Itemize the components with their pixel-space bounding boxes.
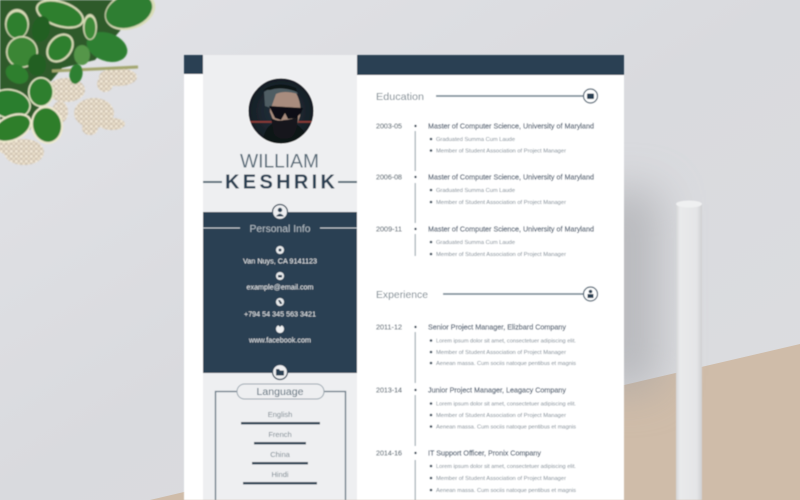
icon: phone xyxy=(276,298,284,306)
experience entry 3 xyxy=(376,450,576,500)
education entry 3: 2009-11 xyxy=(376,226,402,234)
header block left xyxy=(184,55,203,74)
experience entry 2 xyxy=(376,388,576,446)
experience entry 1 xyxy=(376,324,576,383)
language: English: English xyxy=(268,410,292,419)
heading rule right xyxy=(320,228,357,229)
beige tabletop xyxy=(150,344,800,500)
heading: experience: Experience xyxy=(376,289,428,301)
address text: Van Nuys, CA 9141123 xyxy=(243,258,317,266)
education entry 1: Master of Computer Science, University of Maryland xyxy=(428,124,594,130)
experience entry 2: Junior Project Manager, Leagacy Company xyxy=(428,388,567,394)
experience entry 3: 2014-16 xyxy=(376,450,402,458)
name rule left xyxy=(203,181,222,183)
education entry 3 xyxy=(376,226,594,258)
education entry 1: Member of Student Association of Project Manager xyxy=(436,148,566,154)
experience entry 1: Lorem ipsum dolor sit amet, consectetuer adipiscing elit. xyxy=(436,338,576,344)
language frame xyxy=(216,392,346,500)
heading rule left xyxy=(203,228,240,229)
icon: person badge xyxy=(584,287,598,301)
education entry 2: Graduated Summa Cum Laude xyxy=(436,188,515,194)
sidebar background xyxy=(203,55,357,500)
education entry 1 xyxy=(376,124,594,171)
experience entry 3: Lorem ipsum dolor sit amet, consectetuer adipiscing elit. xyxy=(436,464,576,470)
background shadow of paper xyxy=(590,190,660,390)
name rule right xyxy=(338,181,357,183)
icon: folder badge xyxy=(272,364,288,380)
experience entry 2: Lorem ipsum dolor sit amet, consectetuer adipiscing elit. xyxy=(436,402,576,408)
language heading pill xyxy=(237,384,324,399)
icon: person badge xyxy=(272,204,288,220)
experience entry 1: Aenean massa. Cum sociis natoque pentibus et magnis xyxy=(436,361,576,367)
header bar right xyxy=(357,55,624,75)
education entry 3: Graduated Summa Cum Laude xyxy=(436,240,515,246)
resume paper xyxy=(184,55,624,500)
icon: briefcase badge xyxy=(584,89,598,103)
heading: education: Education xyxy=(376,91,424,103)
email text: example@email.com xyxy=(246,284,314,292)
experience entry 3: Member of Student Association of Project Manager xyxy=(436,476,566,482)
panel: personal info xyxy=(203,212,357,373)
experience entry 2: Aenean massa. Cum sociis natoque pentibus et magnis xyxy=(436,424,576,430)
experience entry 2: 2013-14 xyxy=(376,388,402,394)
first name: WILLIAM xyxy=(240,152,319,172)
rod prop xyxy=(676,200,702,500)
education entry 3: Member of Student Association of Project Manager xyxy=(436,252,566,258)
experience entry 1: Senior Project Manager, Elizbard Company xyxy=(428,324,567,332)
experience entry 3: Aenean massa. Cum sociis natoque pentibus et magnis xyxy=(436,488,576,494)
icon: email xyxy=(276,272,284,280)
education entry 2: Member of Student Association of Project Manager xyxy=(436,200,566,206)
dark foliage backdrop xyxy=(0,0,125,130)
education entry 1: 2003-05 xyxy=(376,124,402,130)
panel: language xyxy=(216,384,346,500)
name xyxy=(203,152,357,194)
experience entry 2: Member of Student Association of Project Manager xyxy=(436,413,566,419)
phone text: +794 54 345 563 3421 xyxy=(244,312,316,318)
heading: personal info: Personal Info xyxy=(250,224,311,235)
education entry 2: Master of Computer Science, University of Maryland xyxy=(428,174,594,182)
education entry 3: Master of Computer Science, University of Maryland xyxy=(428,226,594,234)
language: French: French xyxy=(268,430,292,439)
icon: web xyxy=(276,325,284,333)
plant decoration xyxy=(0,0,161,165)
education entry 2 xyxy=(376,174,594,223)
profile photo xyxy=(248,78,314,145)
experience entry 1: Member of Student Association of Project Manager xyxy=(436,350,566,356)
heading: language: Language xyxy=(256,387,304,398)
experience entry 3: IT Support Officer, Pronix Company xyxy=(428,450,541,458)
stem xyxy=(52,67,138,71)
icon: address xyxy=(276,246,284,254)
website text: www.facebook.com xyxy=(248,338,311,344)
language: China: China xyxy=(270,450,291,459)
education entry 2: 2006-08 xyxy=(376,174,402,182)
education entry 1: Graduated Summa Cum Laude xyxy=(436,137,515,143)
panel background xyxy=(203,212,357,373)
section: experience xyxy=(376,287,598,500)
last name: KESHRIK xyxy=(225,172,336,194)
blossom clusters xyxy=(0,68,137,165)
paper sheet xyxy=(184,55,624,500)
language: Hindi: Hindi xyxy=(271,470,289,479)
education rule xyxy=(436,95,584,97)
experience rule xyxy=(443,293,584,295)
experience entry 1: 2011-12 xyxy=(376,324,402,332)
section: education xyxy=(376,89,598,258)
photo ring xyxy=(248,78,314,144)
leaves xyxy=(0,0,161,149)
